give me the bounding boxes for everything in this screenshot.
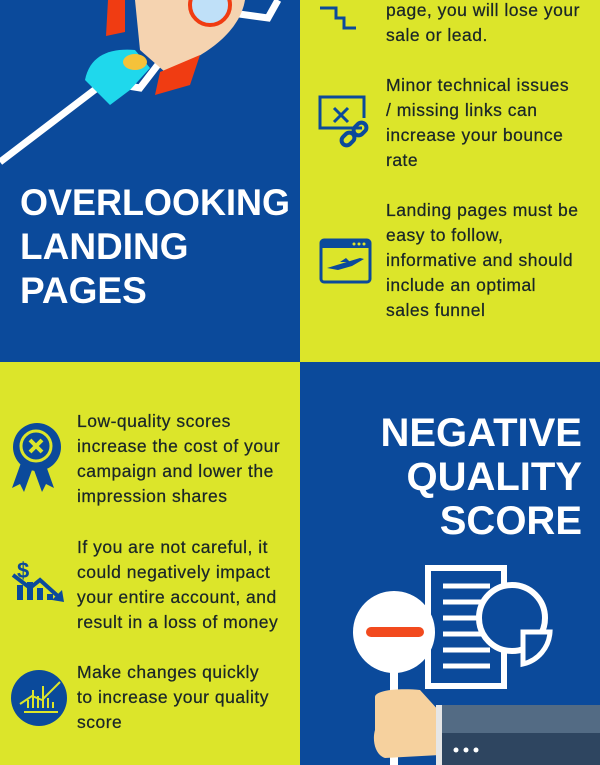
illustration: hand with minus sign and report [353,568,600,765]
title: overlooking landing pages [20,182,290,311]
text block: landing pages must: Landing pages must be [386,200,578,220]
text block: technical issues: increase your bounce [386,125,563,145]
title: overlooking landing pages: PAGES [20,270,147,311]
text block: make changes: to increase your quality [77,687,269,707]
icon: dollar down chart [13,558,64,602]
panel: top-right yellow [300,0,600,362]
title: overlooking landing pages: OVERLOOKING [20,182,290,223]
panel: top-left blue [0,0,300,362]
text block: low-quality scores: impression shares [77,486,228,506]
text block: make changes: Make changes quickly [77,662,259,682]
text block: technical issues [386,75,569,170]
text block: make changes: score [77,712,122,732]
title: negative quality score: QUALITY [406,455,582,499]
text block: not careful [77,537,278,632]
text block: not careful: If you are not careful, it [77,537,268,557]
text block: not careful: your entire account, and [77,587,277,607]
icon: circle chart [11,670,67,726]
icon: broken link [320,97,368,147]
title: negative quality score [380,411,582,543]
text block: technical issues: rate [386,150,418,170]
text block: lose sale: sale or lead. [386,25,488,45]
icon: dollar down chart: $ [17,558,29,583]
panel: bottom-right blue [300,362,600,765]
title: negative quality score: NEGATIVE [380,411,582,455]
text block: technical issues: / missing links can [386,100,538,120]
title: overlooking landing pages: LANDING [20,226,189,267]
text block: low-quality scores: campaign and lower the [77,461,274,481]
panel: bottom-left yellow [0,362,300,765]
text block: lose sale [386,0,580,45]
text block: low-quality scores: increase the cost of your [77,436,280,456]
text block: landing pages must: include an optimal [386,275,536,295]
text block: lose sale: page, you will lose your [386,0,580,20]
illustration: rocket [0,0,278,162]
text block: low-quality scores [77,411,280,506]
title: negative quality score: SCORE [440,499,582,543]
text block: make changes [77,662,269,732]
text block: landing pages must: easy to follow, [386,225,503,245]
text block: not careful: result in a loss of money [77,612,278,632]
text block: landing pages must: sales funnel [386,300,485,320]
text block: low-quality scores: Low-quality scores [77,411,231,431]
icon: steps [320,8,356,28]
icon: badge [12,423,61,492]
text block: landing pages must: informative and should [386,250,573,270]
text block: landing pages must [386,200,578,320]
text block: not careful: could negatively impact [77,562,270,582]
icon: browser with plane [321,240,370,282]
text block: technical issues: Minor technical issues [386,75,569,95]
